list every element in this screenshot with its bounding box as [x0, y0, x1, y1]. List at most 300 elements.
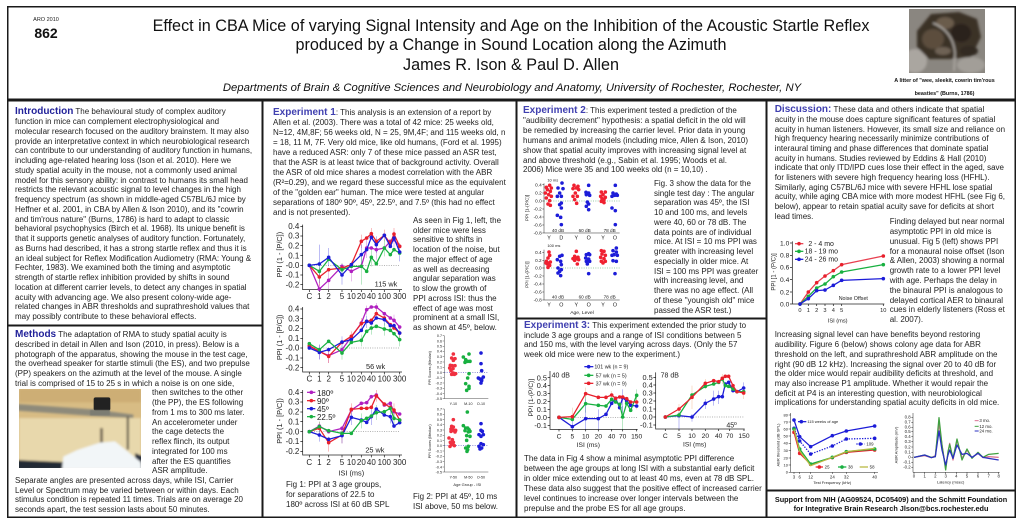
methods text: beside photo: from 1 ms to 300 ms later.	[152, 408, 244, 417]
experiment 2 text: beside chart: especially in older mice. At	[654, 257, 748, 266]
experiment 1 text: N=12, 4M,8F; 56 weeks old, N = 25, 9M,4F; and 115 weeks old, n	[273, 128, 505, 137]
line chart: noise offset PPI: 0.4	[780, 277, 789, 284]
experiment 1 text: beside chart: location of the noise, but	[413, 245, 500, 254]
line chart: noise offset PPI: 0.8	[780, 253, 789, 260]
experiment 3 text: below charts: The data in Fig 4 show a minimal asymptotic PPI difference	[524, 454, 734, 463]
line chart: ABR threshold by frequency	[775, 412, 878, 485]
dot plot: ISI 100 ms	[525, 243, 620, 316]
dot plot: PPI at 45 degrees by age group: 0.0	[437, 444, 442, 448]
line chart: ABR threshold by frequency: 25	[825, 465, 830, 470]
line chart: 78 dB: 0.1	[642, 405, 653, 414]
experiment 1 text: and is not presented).	[273, 208, 350, 217]
line chart: noise offset PPI: 0	[798, 308, 801, 314]
dot plot: PPI at 45 degrees by age group: 0.5	[437, 418, 442, 422]
introduction text: may possibly contribute to these behavioral effects.	[15, 312, 196, 321]
experiment 3 text: below charts	[524, 454, 762, 513]
dot plot: PPI at 45 degrees by age group: -0.1	[436, 450, 442, 454]
line chart: 40 dB with legend: PPI [1-(P/C)]	[528, 379, 535, 417]
methods text: beside photo: the cage detects the	[152, 427, 224, 436]
experiment 1 text: the ASR of old mice shares a modest correlation with the ABR	[273, 168, 492, 177]
dot plot: ISI 10 ms: 10 ms	[547, 178, 558, 183]
dot plot: PPI at 45 degrees by age group: Y-10	[450, 402, 457, 406]
dot plot: ISI 10 ms: 0.2	[535, 191, 542, 196]
line chart: PPI at 25 wk with legend: PPI (1 - [P/C])	[275, 398, 284, 444]
line chart: ABR waveform amplitude: 0.1	[905, 450, 911, 455]
line chart: 78 dB	[640, 372, 750, 449]
line chart: PPI at 25 wk with legend: 1	[317, 458, 322, 467]
photo caption: beasties" (Burns, 1786)	[915, 90, 974, 96]
line chart: PPI at 56 wk: 100	[378, 375, 392, 384]
dot plot: ISI 10 ms: PPI [1-(P/C)]	[525, 195, 530, 221]
line chart: noise offset PPI: 18 - 19 mo	[804, 249, 838, 256]
line chart: 40 dB with legend: 0.2	[536, 397, 547, 406]
experiment 1 text: beside chart: as well as decreasing	[413, 265, 489, 274]
line chart: noise offset PPI: ISI (ms)	[827, 319, 847, 325]
dot plot: ISI 100 ms: Y	[547, 302, 551, 308]
methods text: below photo: Level or Spectrum may be varied between or within days. Each	[15, 486, 239, 495]
dot plot: PPI at 45 degrees by age group: 0.1	[437, 366, 442, 370]
discussion text: acuity in humans. Studies reviewed by Eddins & Hall (2010)	[775, 154, 986, 163]
experiment 1 text	[273, 107, 506, 217]
dot plot: ISI 10 ms: 0.4	[535, 182, 542, 187]
dot plot: PPI at 45 degrees by age group: M-10	[464, 402, 473, 406]
line chart: PPI at 25 wk with legend: -0.1	[286, 437, 300, 446]
title: Effect in CBA Mice of varying Signal Intensity and Age on the Inhibition of the Acoustic Startle Reflex	[153, 17, 869, 35]
dot plot: ISI 100 ms: 40 dB	[552, 294, 564, 299]
line chart: PPI at 56 wk: C	[306, 375, 312, 384]
introduction text: restricts the relevant acoustic signal to level changes in the high	[15, 185, 241, 194]
dot plot: ISI 100 ms: 78 dB	[604, 294, 616, 299]
line chart: ABR waveform amplitude: 0.4	[905, 434, 911, 439]
dot plot: ISI 100 ms: 0.0	[535, 266, 542, 271]
line chart: PPI at 56 wk: 40	[367, 375, 376, 384]
line chart: ABR threshold by frequency: 40	[872, 474, 878, 479]
poster number: 862	[34, 25, 58, 41]
dot plot: PPI at 45 degrees by age group: 0.7	[437, 408, 442, 412]
line chart: ABR waveform amplitude: 2	[934, 474, 937, 479]
line chart: ABR waveform amplitude: ABR Amplitude (mV)	[894, 426, 899, 463]
line chart: PPI at 25 wk with legend: ISI (ms)	[339, 468, 364, 477]
dot plot: ISI 100 ms: -0.4	[534, 282, 542, 287]
conference label: ARO 2010	[33, 17, 59, 23]
dot plot: ISI 10 ms: Y	[575, 236, 579, 242]
affiliation: Departments of Brain & Cognitive Sciences and Neurobiology and Anatomy, University of Rochester, Rochester, NY	[223, 82, 801, 94]
methods text: photograph of the apparatus, showing the mouse in the test cage,	[15, 350, 248, 359]
figure 2 caption: ISI above, 50 ms below.	[413, 502, 498, 511]
line chart: ABR threshold by frequency: 20	[784, 455, 789, 460]
line chart: 78 dB: C	[663, 433, 668, 440]
line chart: ABR waveform amplitude: 0.3	[905, 439, 911, 444]
dot plot: ISI 100 ms: -0.8	[534, 298, 542, 303]
line chart: 78 dB: ISI (ms)	[683, 442, 706, 449]
discussion text: beside chart: for a monaural noise offset (Ison	[890, 247, 1004, 256]
dot plot: PPI at 45 degrees by age group: -0.2	[436, 382, 442, 386]
line chart: ABR threshold by frequency: 30	[784, 448, 789, 453]
methods text: below photo: stimulus condition is repeated 11 times. Trials are on average 20	[15, 495, 243, 504]
experiment 3 text: week old mice were new to the experiment.)	[524, 350, 680, 359]
introduction text: study spatial acuity in the mouse, not a commonly used animal	[15, 166, 237, 175]
experiment 2 text: beside chart: 10 and 100 ms, and levels	[654, 208, 747, 217]
dot plot: PPI at 45 degrees by age group: -0.4	[436, 392, 442, 396]
figure 1 caption	[286, 480, 390, 509]
line chart: ABR threshold by frequency: 32	[844, 474, 849, 479]
introduction text: related changes in ABR thresholds and suprathreshold values that	[15, 302, 249, 311]
line chart: PPI at 56 wk: 0.4	[288, 305, 300, 314]
methods text: below photo: seconds apart, the test session lasts about 50 minutes.	[15, 505, 210, 514]
methods text: beside photo: reflex flinch, its output	[152, 437, 229, 446]
line chart: PPI at 56 wk: 300	[393, 375, 407, 384]
line chart: PPI at 56 wk: -0.0	[286, 344, 300, 353]
line chart: PPI at 25 wk with legend: 45º	[317, 405, 329, 414]
introduction text: model for this sensory ability: in contrast to humans its small head	[15, 176, 248, 185]
line chart: ABR threshold by frequency: 6	[798, 474, 801, 479]
experiment 1 text: beside chart: sensitive to shifts in	[413, 235, 482, 244]
line chart: PPI at 25 wk with legend: 2	[326, 458, 331, 467]
introduction text: location at different carrier levels, to detect any changes in spatial	[15, 283, 247, 292]
line chart: noise offset PPI: 0.2	[780, 290, 789, 297]
experiment 1 text: beside chart: PPI across ISI: thus the	[413, 294, 497, 303]
dot plot: PPI at 45 degrees by age group: M-50	[464, 476, 473, 480]
line chart: ABR waveform amplitude: 0	[908, 455, 911, 460]
line chart: 40 dB with legend: 40 dB	[551, 373, 570, 380]
discussion text: beside chart: the binaural PPI is analogous to	[890, 286, 1003, 295]
dot plot: PPI at 45 degrees by age group: 0.7	[437, 334, 442, 338]
line chart: 78 dB: 0.5	[642, 373, 653, 382]
line chart: 78 dB: 70	[726, 433, 734, 440]
line chart: 40 dB with legend: ISI (ms)	[576, 442, 600, 449]
discussion text: beside chart: cues in elderly listeners (Ross et	[890, 305, 1005, 314]
line chart: PPI at 25 wk with legend: 300	[393, 458, 407, 467]
line chart: PPI at 25 wk with legend: C	[306, 458, 312, 467]
line chart: noise offset PPI: 0.0	[780, 302, 789, 309]
dot plot: ISI 10 ms	[525, 178, 620, 242]
dot plot: PPI at 45 degrees by age group: Y-50	[450, 476, 457, 480]
experiment 1 text: that the ASR is at least twice that of background activity. Overall	[273, 158, 499, 167]
photo: litter of mice	[909, 9, 985, 73]
dot plot: PPI at 45 degrees by age group: -0.1	[436, 376, 442, 380]
dot plot: ISI 100 ms: O	[613, 302, 617, 308]
discussion text: beside chart: Finding delayed but near normal	[890, 217, 1004, 226]
line chart: noise offset PPI: 24 - 26 mo	[804, 257, 838, 264]
line chart: 40 dB with legend: 0.5	[536, 373, 547, 382]
dot plot: ISI 100 ms: -0.6	[534, 290, 542, 295]
dot plot: ISI 10 ms: O	[587, 236, 591, 242]
discussion text: beside chart: & Allen, 2003) showing a normal	[890, 256, 1004, 265]
line chart: PPI at 25 wk with legend: 0.2	[288, 408, 300, 417]
line chart: ABR waveform amplitude: 4	[955, 474, 958, 479]
panel: methods	[7, 325, 263, 518]
discussion text: beside chart: unusual. Fig 5 (left) shows PPI	[890, 237, 998, 246]
line chart: PPI at 56 wk: -0.1	[286, 354, 300, 363]
methods text: trial is comprised of 15 to 25 s in which a noise is on one side,	[15, 379, 234, 388]
discussion text: acuity, while aging CBA mice with more modest HFHL (see Fig 6,	[775, 192, 1005, 201]
dot plot: PPI at 45 degrees by age group: -0.5	[436, 471, 442, 475]
dot plot: PPI at 45 degrees by age group: -0.5	[436, 397, 442, 401]
line chart: PPI at 115 wk: C	[306, 292, 312, 301]
experiment 2 text: beside chart: ISI = 100 ms PPI was greater	[654, 267, 758, 276]
discussion text: beside chart: delayed cortical AER to binaural	[890, 296, 1003, 305]
experiment 3 text: below charts: in older mice extending out to at least 40 ms, even at 78 dB SPL.	[524, 474, 754, 483]
line chart: PPI at 56 wk	[275, 303, 407, 384]
title	[153, 17, 870, 74]
methods text: beside photo: An accelerometer under	[152, 418, 237, 427]
introduction text: as Burns had described, it has a strong startle reflex and thus it is	[15, 244, 247, 253]
dot plot: PPI at 45 degrees by age group: 0.0	[437, 371, 442, 375]
dot plot: ISI 10 ms: 40 dB	[552, 228, 564, 233]
line chart: 40 dB with legend	[528, 364, 642, 449]
line chart: ABR waveform amplitude: 24 mo.	[979, 429, 993, 434]
experiment 3 text: below charts: These data also suggest that the positive effect of increased carrier	[524, 484, 762, 493]
figure 1 caption: 180º across ISI at 60 dB SPL	[286, 500, 389, 509]
experiment 2 text: beside chart: data points are of individual	[654, 228, 751, 237]
discussion text: beside chart: al. 2007).	[890, 315, 923, 324]
line chart: PPI at 56 wk: PPI (1 - [P/C])	[275, 315, 284, 360]
line chart: noise offset PPI: 1	[806, 308, 810, 314]
line chart: PPI at 25 wk with legend: 20	[357, 458, 366, 467]
experiment 1 text: beside chart: the major effect of age	[413, 255, 492, 264]
line chart: ABR waveform amplitude: 0.6	[905, 425, 911, 430]
line chart: noise offset PPI: PPI [1 - (P/C)]	[771, 253, 777, 291]
experiment 2 text: beside chart: passed the ASR test.)	[654, 306, 731, 315]
support text	[775, 495, 1007, 513]
experiment 2 text: beside chart: of these "youngish old" mice	[654, 296, 754, 305]
line chart: PPI at 115 wk: 1	[317, 292, 322, 301]
line chart: 78 dB: -0.1	[640, 421, 653, 430]
experiment 1 text: have a reduced ASR: only 7 of these mice passed an ASR test,	[273, 148, 497, 157]
line chart: noise offset PPI: 3	[823, 308, 826, 314]
introduction text: function in mice can complement electrophysiological and	[15, 117, 219, 126]
experiment 1 text: beside chart	[413, 216, 501, 332]
line chart: 40 dB with legend: 0.0	[536, 413, 547, 422]
line chart: ABR threshold by frequency: 60	[784, 426, 789, 431]
line chart: PPI at 115 wk: -0.2	[286, 280, 300, 289]
figure 2 caption	[413, 492, 498, 511]
experiment 2 text	[523, 105, 748, 174]
experiment 2 text: beside chart: with increasing level, and	[654, 276, 743, 285]
discussion text: below), appear to retain spatial acuity save for deficits at short	[775, 202, 994, 211]
line chart: ABR waveform amplitude: Latency (msec)	[937, 480, 965, 485]
discussion text	[774, 104, 1005, 221]
line chart: PPI at 25 wk with legend: 0.1	[288, 417, 300, 426]
line chart: PPI at 25 wk with legend: 5	[340, 458, 345, 467]
line chart: noise offset PPI: 4	[831, 308, 835, 314]
dot plot: PPI at 45 degrees by age group: 0.4	[437, 350, 442, 354]
line chart: ABR waveform amplitude: 0.2	[905, 444, 911, 449]
dot plot: PPI at 45 degrees by age group: 0.1	[437, 439, 442, 443]
dot plot: ISI 10 ms: 0.0	[535, 199, 542, 204]
figure 1 caption: for separations of 22.5 to	[286, 490, 374, 499]
line chart: ABR threshold by frequency: 115 weeks of age	[807, 419, 839, 424]
dot plot: ISI 10 ms: -0.4	[534, 215, 542, 220]
line chart: 78 dB: 5	[677, 433, 681, 440]
line chart: PPI at 115 wk: 0.1	[288, 251, 300, 260]
methods text: Methods The adaptation of RMA to study spatial acuity is	[15, 329, 227, 340]
dot plot: ISI 100 ms: Age, Level	[570, 310, 594, 316]
dot plot: ISI 10 ms: O	[613, 236, 617, 242]
title: produced by a Change in Sound Location along the Azimuth	[295, 36, 727, 54]
discussion text: beside chart: growth rate to a lower PPI level	[890, 266, 1000, 275]
line chart: noise offset PPI: 2	[815, 308, 818, 314]
line chart: PPI at 25 wk with legend: 0.3	[288, 398, 300, 407]
line chart: 78 dB: 45º	[726, 423, 737, 430]
experiment 2 text: humans and animal models (including mice, Allen & Ison, 2010)	[523, 136, 748, 145]
line chart: 40 dB with legend: C	[556, 433, 561, 440]
discussion text: beside chart	[890, 217, 1005, 324]
discussion text: second paragraph: deficit at P4 is an interesting question, with neurobiological	[775, 389, 982, 398]
line chart: ABR waveform amplitude: 7	[987, 474, 990, 479]
line chart: PPI at 56 wk: 0.1	[288, 334, 300, 343]
introduction text: Fechter, 1983). We examined both the timing and asymptotic	[15, 263, 231, 272]
experiment 1 text: beside chart: As seen in Fig 1, left, the	[413, 216, 501, 225]
line chart: PPI at 115 wk: 300	[393, 292, 407, 301]
line chart: 40 dB with legend: 57 wk (n = 5)	[595, 373, 626, 379]
introduction text: including age-related hearing loss (Ison et al. 2010). Here we	[15, 156, 231, 165]
panel: introduction	[7, 100, 263, 326]
experiment 2 text: beside chart: were 40, 60 or 78 dB. The	[654, 218, 746, 227]
methods text: below photo	[15, 476, 243, 514]
line chart: ABR waveform amplitude: 0.7	[905, 420, 911, 425]
line chart: ABR threshold by frequency: 50	[784, 433, 789, 438]
introduction text: acuity with advancing age. We also present colony-wide age-	[15, 293, 231, 302]
introduction text: an ideal subject for Reflex Modification Audiometry (RMA: Young &	[15, 254, 251, 263]
line chart: ABR threshold by frequency: Test Frequency (kHz)	[813, 480, 852, 485]
figure 2 caption: Fig 2: PPI at 45º, 10 ms	[413, 492, 497, 501]
line chart: PPI at 56 wk: -0.2	[286, 364, 300, 373]
discussion text: indicate that only ITD/IPD cues lose their effect in the aged, save	[775, 163, 1004, 172]
experiment 1 text: = 18, 11 M, 7F. Very old mice, like old humans, (Ford et al. 1995)	[273, 138, 502, 147]
line chart: ABR threshold by frequency: 40	[784, 441, 789, 446]
introduction text: Introduction The behavioural study of complex auditory	[15, 106, 226, 117]
line chart: ABR threshold by frequency: 10	[784, 462, 789, 467]
line chart: noise offset PPI: 5	[840, 308, 843, 314]
experiment 3 text: below charts: between the age groups at long ISI with a substantial early deficit	[524, 464, 754, 473]
discussion text: second paragraph: the older mice would repair audibility deficits at threshold, and	[775, 369, 993, 378]
figure 1 caption: Fig 1: PPI at 3 age groups,	[286, 480, 381, 489]
experiment 1 text: beside chart: prominent at a small ISI,	[413, 313, 499, 322]
dot plot: ISI 10 ms: 60 dB	[579, 228, 591, 233]
introduction text: provide an interpretative context in which neurobiological research	[15, 137, 249, 146]
experiment 1 text: Experiment 1: This analysis is an extension of a report by	[273, 107, 491, 118]
experiment 2 text: be remedied by increasing the carrier level. Prior data in young	[523, 126, 745, 135]
line chart: 40 dB with legend: 0.4	[536, 381, 547, 390]
experiment 1 text: of the "golden ear" human. The mice were tested at angular	[273, 188, 484, 197]
introduction text: that it supports genetic analyses of auditory function. Fortunately,	[15, 234, 245, 243]
line chart: PPI at 25 wk with legend: 25 wk	[365, 446, 385, 455]
line chart: 78 dB: 0.3	[642, 389, 653, 398]
line chart: PPI at 25 wk with legend	[275, 388, 407, 477]
panel: experiment 1	[262, 100, 517, 518]
dot plot: PPI at 45 degrees by age group: PPI Scores (Median)	[428, 425, 432, 459]
experiment 2 text: Experiment 2: This experiment tested a prediction of the	[523, 105, 737, 116]
experiment 2 text: 2006) Mice were 35 and 100 weeks old (n = 10,10) .	[523, 165, 708, 174]
discussion text: acuity in human listeners. However, its small size and reliance on	[775, 125, 1005, 134]
line chart: 78 dB: 40	[715, 433, 723, 440]
line chart: ABR waveform amplitude: 1	[923, 474, 926, 479]
dot plot: PPI at 45 degrees by age group: 0.2	[437, 361, 442, 365]
discussion text: second paragraph: implications for understanding spatial acuity deficits in old mice.	[775, 398, 999, 407]
line chart: PPI at 25 wk with legend: 40	[367, 458, 376, 467]
dot plot: PPI at 45 degrees by age group: 0.4	[437, 423, 442, 427]
line chart: ABR waveform amplitude: 8	[997, 474, 1000, 479]
line chart: PPI at 115 wk: 0.3	[288, 232, 300, 241]
dot plot: ISI 100 ms: 60 dB	[579, 294, 591, 299]
line chart: PPI at 56 wk: 2	[326, 375, 331, 384]
photo caption: A litter of "wee, sleekit, cowrin tim'rous	[894, 78, 995, 84]
introduction text: behavioral psychophysics (Birch et al. 1968). Its unique benefit is	[15, 224, 245, 233]
line chart: PPI at 115 wk: PPI (1 - [P/C])	[275, 232, 284, 277]
dot plot: PPI at 45 degrees by age group: O-10	[477, 402, 485, 406]
dot plot: ISI 10 ms: 78 dB	[604, 228, 616, 233]
discussion text: beside chart: with age. Perhaps the delay in	[890, 276, 997, 285]
experiment 2 text: beside chart: separation was 45º, the ISI	[654, 198, 749, 207]
support text: Support from NIH (AG09524, DC05409) and the Schmitt Foundation	[775, 495, 1007, 504]
line chart: 78 dB: 0.4	[642, 381, 653, 390]
line chart: ABR threshold by frequency: 3	[793, 474, 796, 479]
line chart: noise offset PPI: Noise Offset	[838, 296, 868, 302]
dot plot: ISI 10 ms: Y	[601, 236, 605, 242]
line chart: ABR threshold by frequency: 109	[866, 442, 874, 447]
dot plot: ISI 100 ms: Y	[575, 302, 579, 308]
methods text: described in detail in Allen and Ison (2010, in press). Below is a	[15, 340, 239, 349]
dot plot: ISI 10 ms: Y	[547, 236, 551, 242]
dot plot: PPI at 45 degrees by age group: O-50	[477, 476, 485, 480]
experiment 1 text: Allen et al. (2003). There was a total of 42 mice: 25 weeks old,	[273, 118, 494, 127]
introduction text: frequency spectrum (as shown in middle-aged C57BL/6J mice by	[15, 195, 246, 204]
line chart: PPI at 115 wk: 2	[326, 292, 331, 301]
experiment 2 text: beside chart: Fig. 3 show the data for the	[654, 179, 751, 188]
experiment 2 text: and above threshold (e.g., Sabin et al. 1995; Woods et al.	[523, 156, 727, 165]
line chart: 40 dB with legend: 0.1	[536, 405, 547, 414]
line chart: ABR waveform amplitude: -0.1	[903, 460, 911, 465]
line chart: ABR waveform amplitude: 0	[913, 474, 916, 479]
line chart: PPI at 56 wk: 56 wk	[366, 362, 385, 371]
dot plot: PPI at 45 degrees by age group: 0.6	[437, 340, 442, 344]
experiment 2 text: show that spatial acuity improves with increasing signal level at	[523, 146, 746, 155]
introduction text: and tim'rous nature" (Burns, 1786) is hard to adapt to classic	[15, 215, 229, 224]
line chart: PPI at 115 wk: 0.2	[288, 241, 300, 250]
experiment 1 text: beside chart: effect of age was most	[413, 304, 493, 313]
experiment 3 text: include 3 age groups and a range of ISI conditions between 5	[524, 330, 742, 340]
support text: for Integrative Brain Research Jlson@bcs.rochester.edu	[794, 504, 988, 513]
experiment 1 text: beside chart: angular separation was	[413, 274, 496, 283]
line chart: 78 dB: 150	[738, 433, 750, 440]
dot plot: ISI 10 ms: -0.8	[534, 231, 542, 236]
dot plot: ISI 100 ms: Y	[601, 302, 605, 308]
line chart: 40 dB with legend: 20	[594, 433, 602, 440]
discussion text: second paragraph	[774, 330, 999, 407]
line chart: PPI at 115 wk	[275, 222, 407, 301]
panel: header	[7, 6, 1016, 100]
dot plot: PPI at 45 degrees by age group: 0.6	[437, 413, 442, 417]
line chart: PPI at 115 wk: 5	[340, 292, 345, 301]
line chart: PPI at 25 wk with legend: 10	[347, 458, 356, 467]
line chart: noise offset PPI: 1.0	[780, 241, 789, 248]
introduction text: molecular research focused on the auditory brainstem. It may also	[15, 127, 249, 136]
methods text: beside photo: then switches to the other	[152, 388, 243, 397]
dot plot: PPI at 45 degrees by age group: Age Group - ISI	[454, 482, 482, 487]
line chart: noise offset PPI	[771, 241, 886, 325]
experiment 1 text: separations of 180º 90º, 45º, 22.5º, and 7.5º (this had no effect	[273, 198, 495, 207]
dot plot: PPI at 45 degrees by age group: PPI Scores (Median)	[428, 351, 432, 385]
discussion text: second paragraph: may also increase P1 amplitude. Whether it would repair the	[775, 379, 988, 388]
line chart: 40 dB with legend: -0.1	[534, 421, 547, 430]
methods text: beside photo: (the PP), the ES following	[152, 398, 243, 407]
line chart: PPI at 25 wk with legend: 0.4	[288, 388, 300, 397]
discussion text: lead times.	[775, 212, 813, 221]
line chart: ABR waveform amplitude: 12 mo.	[979, 424, 993, 429]
discussion text: second paragraph: threshold on the left, and suprathreshold ABR amplitude on the	[775, 350, 998, 359]
dot plot: ISI 100 ms: O	[559, 302, 563, 308]
